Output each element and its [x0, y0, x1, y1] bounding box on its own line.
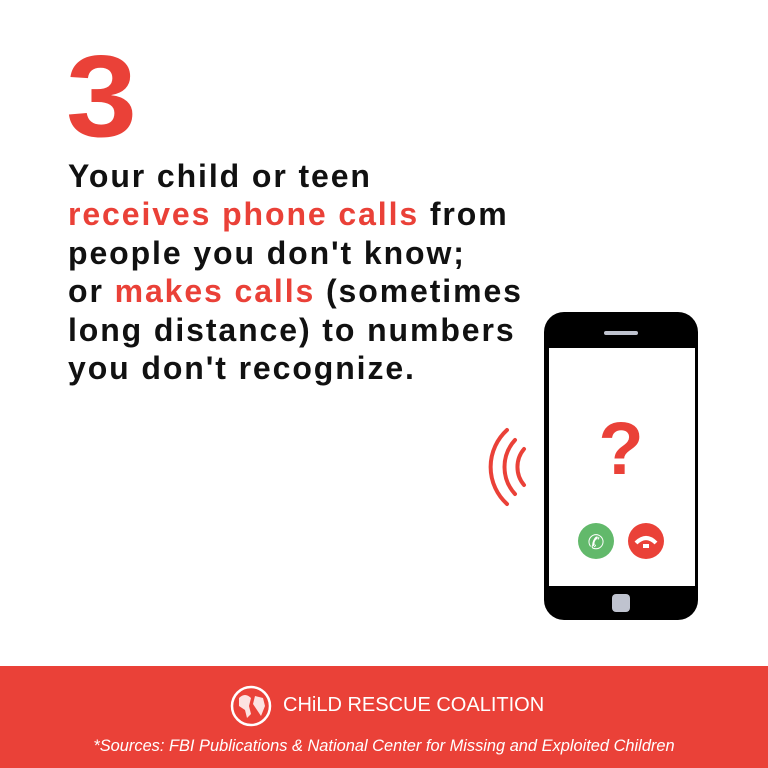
number 3: 3: [66, 31, 137, 161]
headline text: or makes calls (sometimes: [68, 273, 523, 309]
phone body: ✆: [588, 532, 604, 554]
footer band: [0, 666, 768, 768]
icon: ringing waves: [491, 430, 524, 504]
headline text: you don't recognize.: [68, 350, 416, 386]
sources: *Sources: FBI Publications & National Center for Missing and Exploited Children: [93, 737, 675, 755]
headline text: receives phone calls from: [68, 196, 509, 232]
headline text: people you don't know;: [68, 235, 466, 271]
headline text: [68, 158, 523, 386]
icon: globe: [230, 686, 272, 726]
headline text: long distance) to numbers: [68, 312, 516, 348]
logo: [230, 686, 544, 726]
logo: CHiLD RESCUE COALITION: [283, 694, 544, 716]
phone body: ?: [598, 407, 644, 490]
headline text: Your child or teen: [68, 158, 372, 194]
phone body: [544, 312, 698, 620]
